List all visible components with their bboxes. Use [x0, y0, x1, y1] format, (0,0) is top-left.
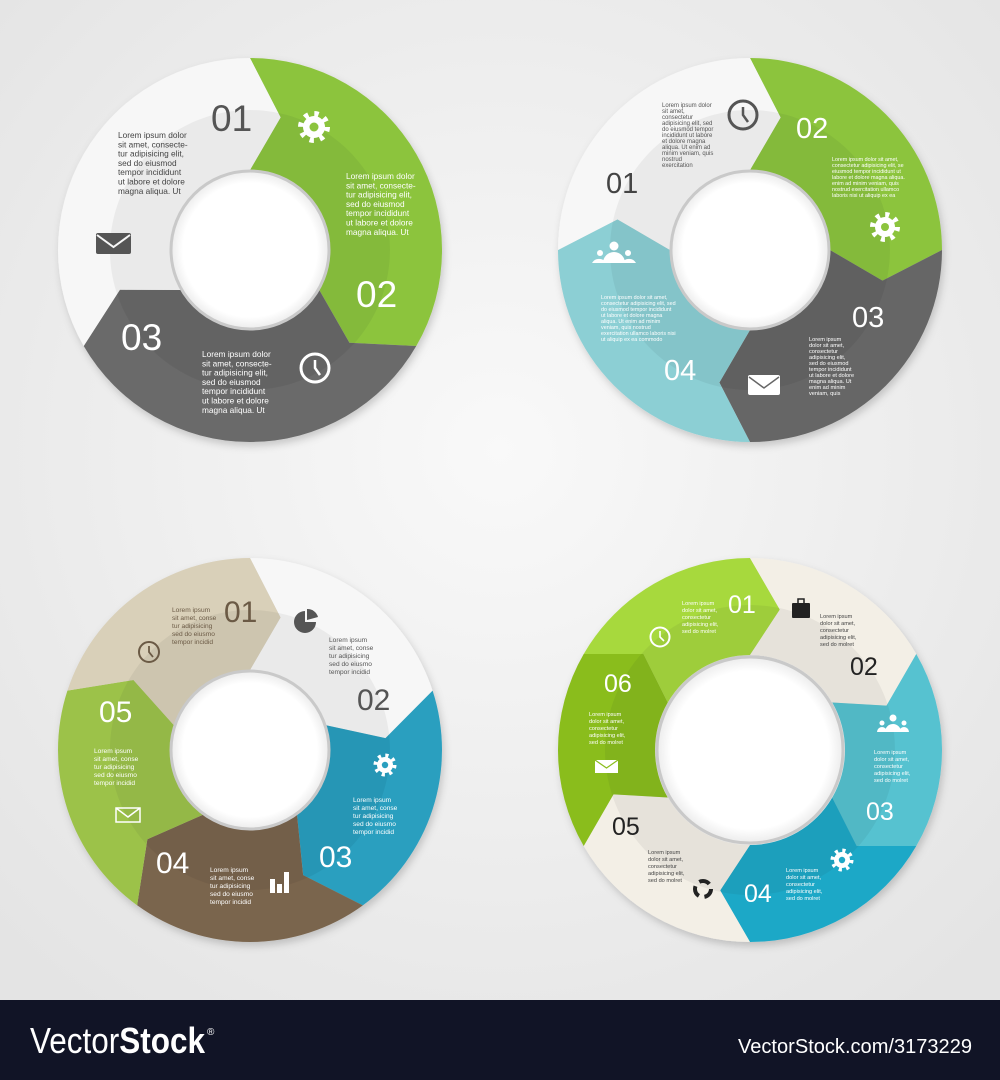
icon: bar chart [270, 872, 289, 893]
center hole 2 [671, 171, 829, 329]
text block 03: sit amet, conse [353, 805, 398, 812]
text block 02: tempor incididunt [346, 208, 410, 218]
text block 01: Lorem ipsum dolor [118, 130, 187, 140]
text block 04: ut labore et dolore magna [601, 313, 662, 319]
text block 02: laboris nisi ut aliquip ex ea [832, 193, 895, 199]
diagram 3: five-step cycle [0, 517, 489, 1013]
text block 05: sed do eiusmo [94, 772, 137, 779]
text block 04: sit amet, conse [210, 875, 255, 882]
number 04: 04 [156, 847, 189, 880]
text block 03: ut labore et dolore [202, 396, 269, 406]
icon: envelope [116, 808, 140, 822]
text block 04: Lorem ipsum dolor sit amet, [601, 295, 668, 301]
icon: people [877, 714, 909, 732]
text block 02: tempor incidid [329, 669, 370, 676]
text block 03: adipisicing elit, [809, 355, 846, 361]
icon: gear [873, 215, 897, 239]
text block 02: Lorem ipsum dolor sit amet, [832, 157, 899, 163]
number 01: 01 [211, 98, 252, 139]
center hole 1 [171, 171, 329, 329]
text block 03: tempor incididunt [202, 386, 266, 396]
text block 02: Lorem ipsum [329, 637, 368, 644]
text block 02: ut labore et dolore [346, 218, 413, 228]
text block 01: sed do molret [682, 629, 716, 635]
text block 05: dolor sit amet, [648, 857, 684, 863]
text block 06: dolor sit amet, [589, 719, 625, 725]
text block 06: sed do molret [589, 740, 623, 746]
icon: clock [650, 628, 670, 646]
text block 02: tur adipisicing elit, [346, 190, 412, 200]
text block 02: sed do molret [820, 642, 854, 648]
number 02: 02 [356, 274, 397, 315]
text block 02: sed do eiusmod [346, 199, 405, 209]
text block 03: sed do eiusmod [202, 377, 261, 387]
text block 01: et dolore magna [662, 139, 706, 145]
text block 04: sed do molret [786, 896, 820, 902]
text block 01: do eiusmod tempor [662, 127, 713, 133]
number 02: 02 [357, 684, 390, 717]
footer registered mark: ® [207, 1027, 215, 1038]
text block 04: Lorem ipsum [210, 867, 249, 874]
icon: clock [139, 642, 159, 662]
text block 04: veniam, quis nostrud [601, 325, 651, 331]
text block 05: Lorem ipsum [648, 850, 681, 856]
number 06: 06 [604, 670, 632, 698]
text block 03: magna aliqua. Ut [809, 379, 852, 385]
text block 03: Lorem ipsum dolor [202, 349, 271, 359]
text block 04: aliqua. Ut enim ad minim [601, 319, 661, 325]
text block 02: consectetur adipisicing elit, se [832, 163, 904, 169]
number 05: 05 [99, 696, 132, 729]
text block 01: tempor incididunt [118, 167, 182, 177]
text block 03: ut labore et dolore [809, 373, 854, 379]
text block 04: exercitation ullamco laboris nisi [601, 331, 676, 337]
text block 03: tempor incidid [353, 829, 394, 836]
text block 01: tempor incidid [172, 639, 213, 646]
text block 04: do eiusmod tempor incididunt [601, 307, 672, 313]
number 03: 03 [852, 302, 884, 334]
ring segments 1 [0, 36, 442, 512]
icon: gear [833, 851, 851, 869]
text block 03: adipisicing elit, [874, 771, 911, 777]
center hole 4 [657, 657, 843, 843]
text block 01: adipisicing elit, [682, 622, 719, 628]
text block 05: sit amet, conse [94, 756, 139, 763]
text block 01: sed do eiusmo [172, 631, 215, 638]
text block 02: sed do eiusmo [329, 661, 372, 668]
text block 04: tur adipisicing [210, 883, 251, 890]
number 03: 03 [319, 841, 352, 874]
text block 03: dolor sit amet, [809, 343, 845, 349]
text block 03: consectetur [874, 764, 903, 770]
number 04: 04 [744, 880, 772, 908]
number 01: 01 [224, 596, 257, 629]
text block 06: consectetur [589, 726, 618, 732]
text block 01: magna aliqua. Ut [118, 186, 181, 196]
text block 01: consectetur [662, 115, 693, 121]
text block 01: sit amet, [662, 109, 685, 115]
diagram 1: three-step cycle [0, 36, 442, 512]
text block 04: consectetur [786, 882, 815, 888]
text block 01: sed do eiusmod [118, 158, 177, 168]
text block 02: sit amet, conse [329, 645, 374, 652]
icon: people [592, 242, 636, 263]
text block 04: tempor incidid [210, 899, 251, 906]
number 01: 01 [728, 591, 756, 619]
text block 03: sed do molret [874, 778, 908, 784]
number 03: 03 [866, 798, 894, 826]
text block 03: veniam, quis [809, 391, 841, 397]
number 04: 04 [664, 355, 696, 387]
text block 01: adipisicing elit, sed [662, 121, 712, 127]
text block 02: enim ad minim veniam, quis [832, 181, 899, 187]
text block 01: exercitation [662, 163, 693, 169]
text block 02: eiusmod tempor incididunt ut [832, 169, 901, 175]
text block 01: sit amet, conse [172, 615, 217, 622]
text block 01: dolor sit amet, [682, 608, 718, 614]
text block 02: labore et dolore magna aliqua. [832, 175, 905, 181]
text block 06: adipisicing elit, [589, 733, 626, 739]
text block 01: Lorem ipsum dolor [662, 103, 712, 109]
footer url: VectorStock.com/3173229 [738, 1036, 972, 1058]
icon: briefcase [792, 599, 810, 618]
text block 05: Lorem ipsum [94, 748, 133, 755]
text block 06: Lorem ipsum [589, 712, 622, 718]
text block 04: dolor sit amet, [786, 875, 822, 881]
text block 01: aliqua. Ut enim ad [662, 145, 710, 151]
text block 04: consectetur adipisicing elit, sed [601, 301, 676, 307]
text block 01: tur adipisicing elit, [118, 149, 184, 159]
text block 03: tur adipisicing elit, [202, 368, 268, 378]
number 02: 02 [796, 113, 828, 145]
number 05: 05 [612, 813, 640, 841]
icon: gear [301, 114, 327, 140]
icon: envelope [595, 760, 618, 773]
text block 03: magna aliqua. Ut [202, 405, 265, 415]
text block 01: incididunt ut labore [662, 133, 713, 139]
number 03: 03 [121, 317, 162, 358]
text block 02: nostrud exercitation ullamco [832, 187, 899, 193]
text block 02: Lorem ipsum [820, 614, 853, 620]
text block 05: adipisicing elit, [648, 871, 685, 877]
text block 02: consectetur [820, 628, 849, 634]
text block 05: consectetur [648, 864, 677, 870]
text block 03: Lorem ipsum [353, 797, 392, 804]
text block 01: ut labore et dolore [118, 176, 185, 186]
icon: envelope [96, 233, 131, 254]
text block 05: tur adipisicing [94, 764, 135, 771]
icon: clock [729, 101, 757, 129]
ring segments 2 [558, 58, 942, 442]
text block 03: Lorem ipsum [809, 337, 842, 343]
text block 04: sed do eiusmo [210, 891, 253, 898]
ring segments 4 [501, 510, 999, 990]
diagram 2: four-step cycle [558, 58, 942, 442]
text block 03: consectetur [809, 349, 838, 355]
icon: clock [301, 354, 329, 382]
text block 04: ut aliquip ex ea commodo [601, 337, 662, 343]
text block 03: Lorem ipsum [874, 750, 907, 756]
text block 02: Lorem ipsum dolor [346, 171, 415, 181]
text block 03: tur adipisicing [353, 813, 394, 820]
text block 01: minim veniam, quis [662, 151, 713, 157]
text block 01: Lorem ipsum [682, 601, 715, 607]
text block 02: sit amet, consecte- [346, 180, 416, 190]
text block 01: consectetur [682, 615, 711, 621]
text block 01: Lorem ipsum [172, 607, 211, 614]
text block 03: sed do eiusmo [353, 821, 396, 828]
footer logo: VectorStock [30, 1020, 206, 1061]
number 02: 02 [850, 653, 878, 681]
text block 01: sit amet, consecte- [118, 139, 188, 149]
number 01: 01 [606, 168, 638, 200]
footer bar [0, 1000, 1000, 1080]
text block 01: nostrud [662, 157, 682, 163]
text block 02: tur adipisicing [329, 653, 370, 660]
text block 03: sit amet, consecte- [202, 358, 272, 368]
text block 03: dolor sit amet, [874, 757, 910, 763]
text block 03: sed do eiusmod [809, 361, 848, 367]
text block 03: enim ad minim [809, 385, 846, 391]
icon: pie chart [294, 609, 318, 633]
ring segments 3 [0, 517, 489, 1013]
text block 01: tur adipisicing [172, 623, 213, 630]
text block 04: adipisicing elit, [786, 889, 823, 895]
diagram 4: six-step cycle [501, 510, 999, 990]
text block 03: tempor incididunt [809, 367, 852, 373]
text block 05: tempor incidid [94, 780, 135, 787]
icon: gear [376, 756, 394, 774]
text block 04: Lorem ipsum [786, 868, 819, 874]
icon: cycle [695, 881, 711, 897]
center hole 3 [171, 671, 329, 829]
text block 02: magna aliqua. Ut [346, 227, 409, 237]
text block 05: sed do molret [648, 878, 682, 884]
text block 02: dolor sit amet, [820, 621, 856, 627]
icon: envelope [748, 375, 780, 395]
text block 02: adipisicing elit, [820, 635, 857, 641]
